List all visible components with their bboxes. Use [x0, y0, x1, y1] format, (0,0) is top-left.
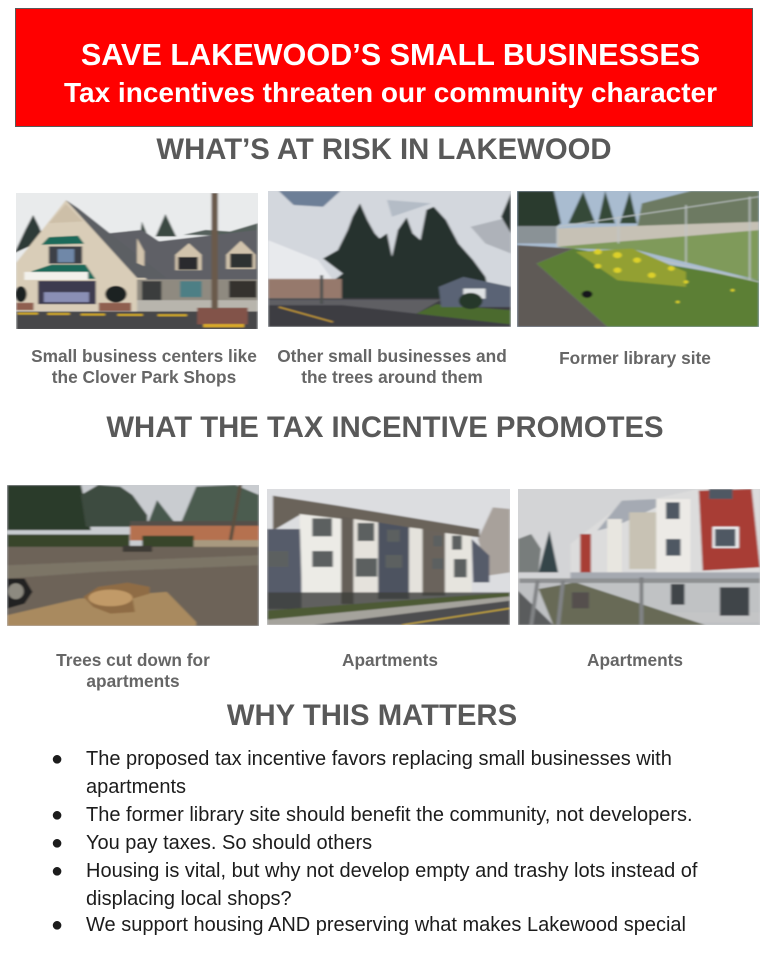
bullet 5: ● — [51, 914, 63, 936]
bullet 1: apartments — [86, 776, 186, 798]
caption: other small businesses — [277, 346, 507, 387]
caption: other small businesses: the trees around them — [301, 367, 483, 387]
bullet 3: You pay taxes. So should others — [86, 832, 372, 854]
title banner — [15, 8, 753, 127]
bullet 4: Housing is vital, but why not develop empty and trashy lots instead of — [86, 860, 697, 882]
caption: trees cut down — [56, 650, 210, 691]
bullet 1: ● — [51, 748, 63, 770]
bullet 5: We support housing AND preserving what makes Lakewood special — [86, 914, 686, 936]
bullet 4 — [51, 860, 698, 910]
photo: apartments front — [267, 489, 510, 625]
caption: other small businesses: Other small businesses and — [277, 346, 507, 366]
bullet 1: The proposed tax incentive favors replacing small businesses with — [86, 748, 672, 770]
caption: small business centers: the Clover Park Shops — [52, 367, 236, 387]
caption: apartments: Apartments — [587, 650, 683, 670]
heading: why this matters: WHY THIS MATTERS — [227, 699, 517, 732]
caption: former library site: Former library site — [559, 348, 711, 368]
photo: trees and small business — [268, 191, 511, 327]
photo: former library site — [517, 191, 759, 327]
bullet 3: ● — [51, 832, 63, 854]
caption: trees cut down: Trees cut down for — [56, 650, 210, 670]
photo: apartments side — [518, 489, 760, 625]
caption: small business centers: Small business centers like — [31, 346, 257, 366]
photo: Clover Park Shops — [16, 193, 258, 329]
subtitle: Tax incentives threaten our community character — [64, 77, 717, 108]
heading: what the tax incentive promotes: WHAT THE TAX INCENTIVE PROMOTES — [106, 411, 664, 444]
bullet 1 — [51, 748, 672, 798]
caption: apartments: Apartments — [342, 650, 438, 670]
heading: what's at risk: WHAT’S AT RISK IN LAKEWOOD — [156, 133, 612, 166]
bullet 4: ● — [51, 860, 63, 882]
bullet 2: ● — [51, 804, 63, 826]
bullet list — [51, 748, 698, 936]
bullet 2: The former library site should benefit the community, not developers. — [86, 804, 693, 826]
photo: trees cut down — [7, 485, 259, 626]
caption: small business centers — [31, 346, 257, 387]
caption: trees cut down: apartments — [86, 671, 180, 691]
bullet 4: displacing local shops? — [86, 888, 292, 910]
title: SAVE LAKEWOOD’S SMALL BUSINESSES — [81, 38, 700, 72]
